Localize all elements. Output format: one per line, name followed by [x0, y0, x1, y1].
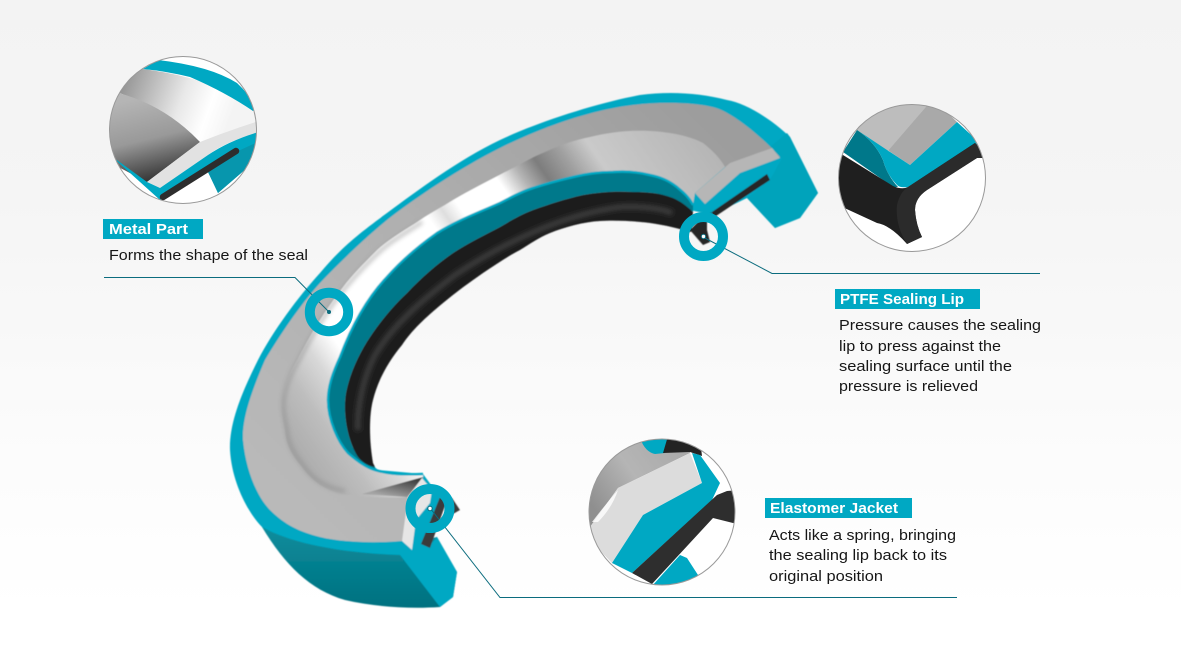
marker ring: PTFE sealing lip: [684, 217, 723, 256]
heading tag: metal part: Metal Part: [109, 221, 188, 238]
light polished metal ring: [282, 131, 725, 498]
callout: elastomer jacket: [765, 498, 956, 585]
description: elastomer jacket: Acts like a spring, bringing: [769, 527, 956, 544]
lower outer body of the seal: [262, 525, 457, 608]
soft sheen on the black ring: [358, 207, 672, 430]
detail circle: PTFE sealing lip: [838, 104, 986, 252]
description: PTFE sealing lip: lip to press against the: [839, 338, 1001, 355]
description: PTFE sealing lip: sealing surface until the: [839, 358, 1012, 375]
black elastomer ring: [345, 192, 693, 467]
callout: metal part: [103, 219, 308, 264]
black insert strip at the top cut: [712, 174, 770, 218]
leader line: elastomer jacket: [430, 508, 957, 598]
callout: PTFE sealing lip: [835, 289, 1041, 395]
description: elastomer jacket: original position: [769, 568, 883, 585]
inner dark teal band: [328, 172, 693, 470]
bright teal inner edge: [328, 172, 693, 474]
description: elastomer jacket: the sealing lip back to its: [769, 547, 947, 564]
detail circle: metal part: [109, 56, 257, 204]
description: PTFE sealing lip: [839, 317, 1041, 395]
white metal edge at the bottom cut: [402, 478, 432, 550]
right block shading: [747, 133, 818, 228]
leader line: metal part: [104, 278, 329, 312]
description: elastomer jacket: [769, 527, 956, 585]
marker ring: metal part: [310, 293, 348, 331]
soft crease on the metal ring: [284, 222, 422, 491]
marker ring: elastomer jacket: [410, 489, 450, 528]
description: metal part: Forms the shape of the seal: [109, 247, 308, 264]
outer grey metal face: [243, 103, 780, 542]
leader line: PTFE sealing lip: [703, 237, 1040, 274]
light metal edge at the top cut: [695, 148, 780, 204]
heading tag: metal part: [103, 219, 203, 239]
heading tag: PTFE sealing lip: PTFE Sealing Lip: [840, 291, 964, 308]
black insert at the bottom cut: [421, 497, 460, 548]
black sealing lip at the top cut: [690, 212, 712, 245]
heading tag: elastomer jacket: Elastomer Jacket: [770, 500, 898, 517]
dark wedge on the metal: [362, 477, 423, 497]
bright teal jacket: [230, 93, 818, 607]
detail circle: elastomer jacket: [588, 438, 736, 586]
seal cross-section illustration: [230, 93, 818, 608]
description: PTFE sealing lip: pressure is relieved: [839, 378, 978, 395]
description: PTFE sealing lip: Pressure causes the sealing: [839, 317, 1041, 334]
